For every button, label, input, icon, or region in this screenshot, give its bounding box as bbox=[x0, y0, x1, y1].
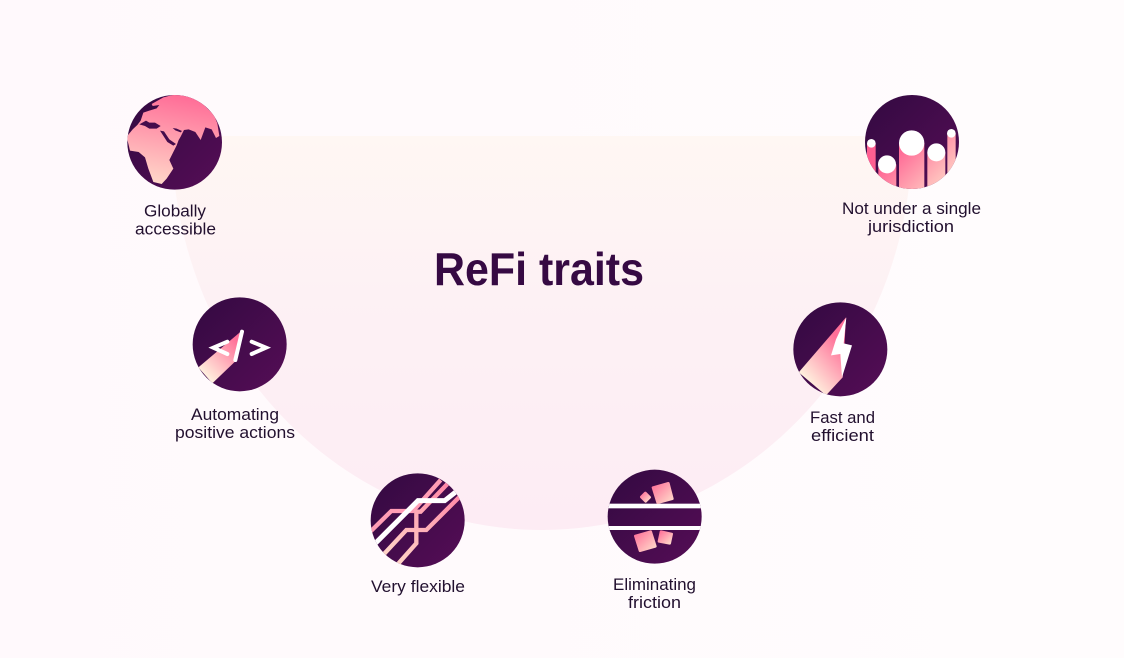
icon: code bbox=[193, 297, 287, 391]
label: Very flexible bbox=[371, 578, 465, 596]
label: jurisdiction bbox=[867, 218, 954, 236]
label bbox=[175, 406, 295, 442]
trait: automating positive actions bbox=[175, 297, 295, 442]
icon: split cubes bbox=[605, 470, 705, 564]
label: Not under a single bbox=[842, 200, 981, 218]
trait: fast and efficient bbox=[793, 302, 887, 445]
label: Fast and bbox=[810, 409, 875, 427]
label: positive actions bbox=[175, 424, 295, 442]
title: ReFi traits bbox=[434, 243, 644, 295]
label: accessible bbox=[135, 220, 216, 238]
trait: not under a single jurisdiction bbox=[842, 95, 981, 236]
icon: globe bbox=[127, 94, 222, 190]
label bbox=[135, 202, 216, 238]
icon: lightning bolt bbox=[793, 302, 887, 396]
trait: very flexible bbox=[371, 473, 465, 596]
icon: crossing lines bbox=[371, 473, 465, 567]
icon: columns bbox=[865, 95, 959, 194]
trait: eliminating friction bbox=[605, 470, 705, 612]
label: Automating bbox=[191, 406, 279, 424]
label: Globally bbox=[144, 202, 207, 220]
trait: globally accessible bbox=[127, 94, 222, 238]
half-circle backdrop bbox=[172, 136, 912, 530]
label: friction bbox=[628, 594, 681, 612]
label: efficient bbox=[811, 427, 874, 445]
label bbox=[842, 200, 981, 236]
label bbox=[810, 409, 875, 445]
label bbox=[613, 576, 696, 612]
label: Eliminating bbox=[613, 576, 696, 594]
